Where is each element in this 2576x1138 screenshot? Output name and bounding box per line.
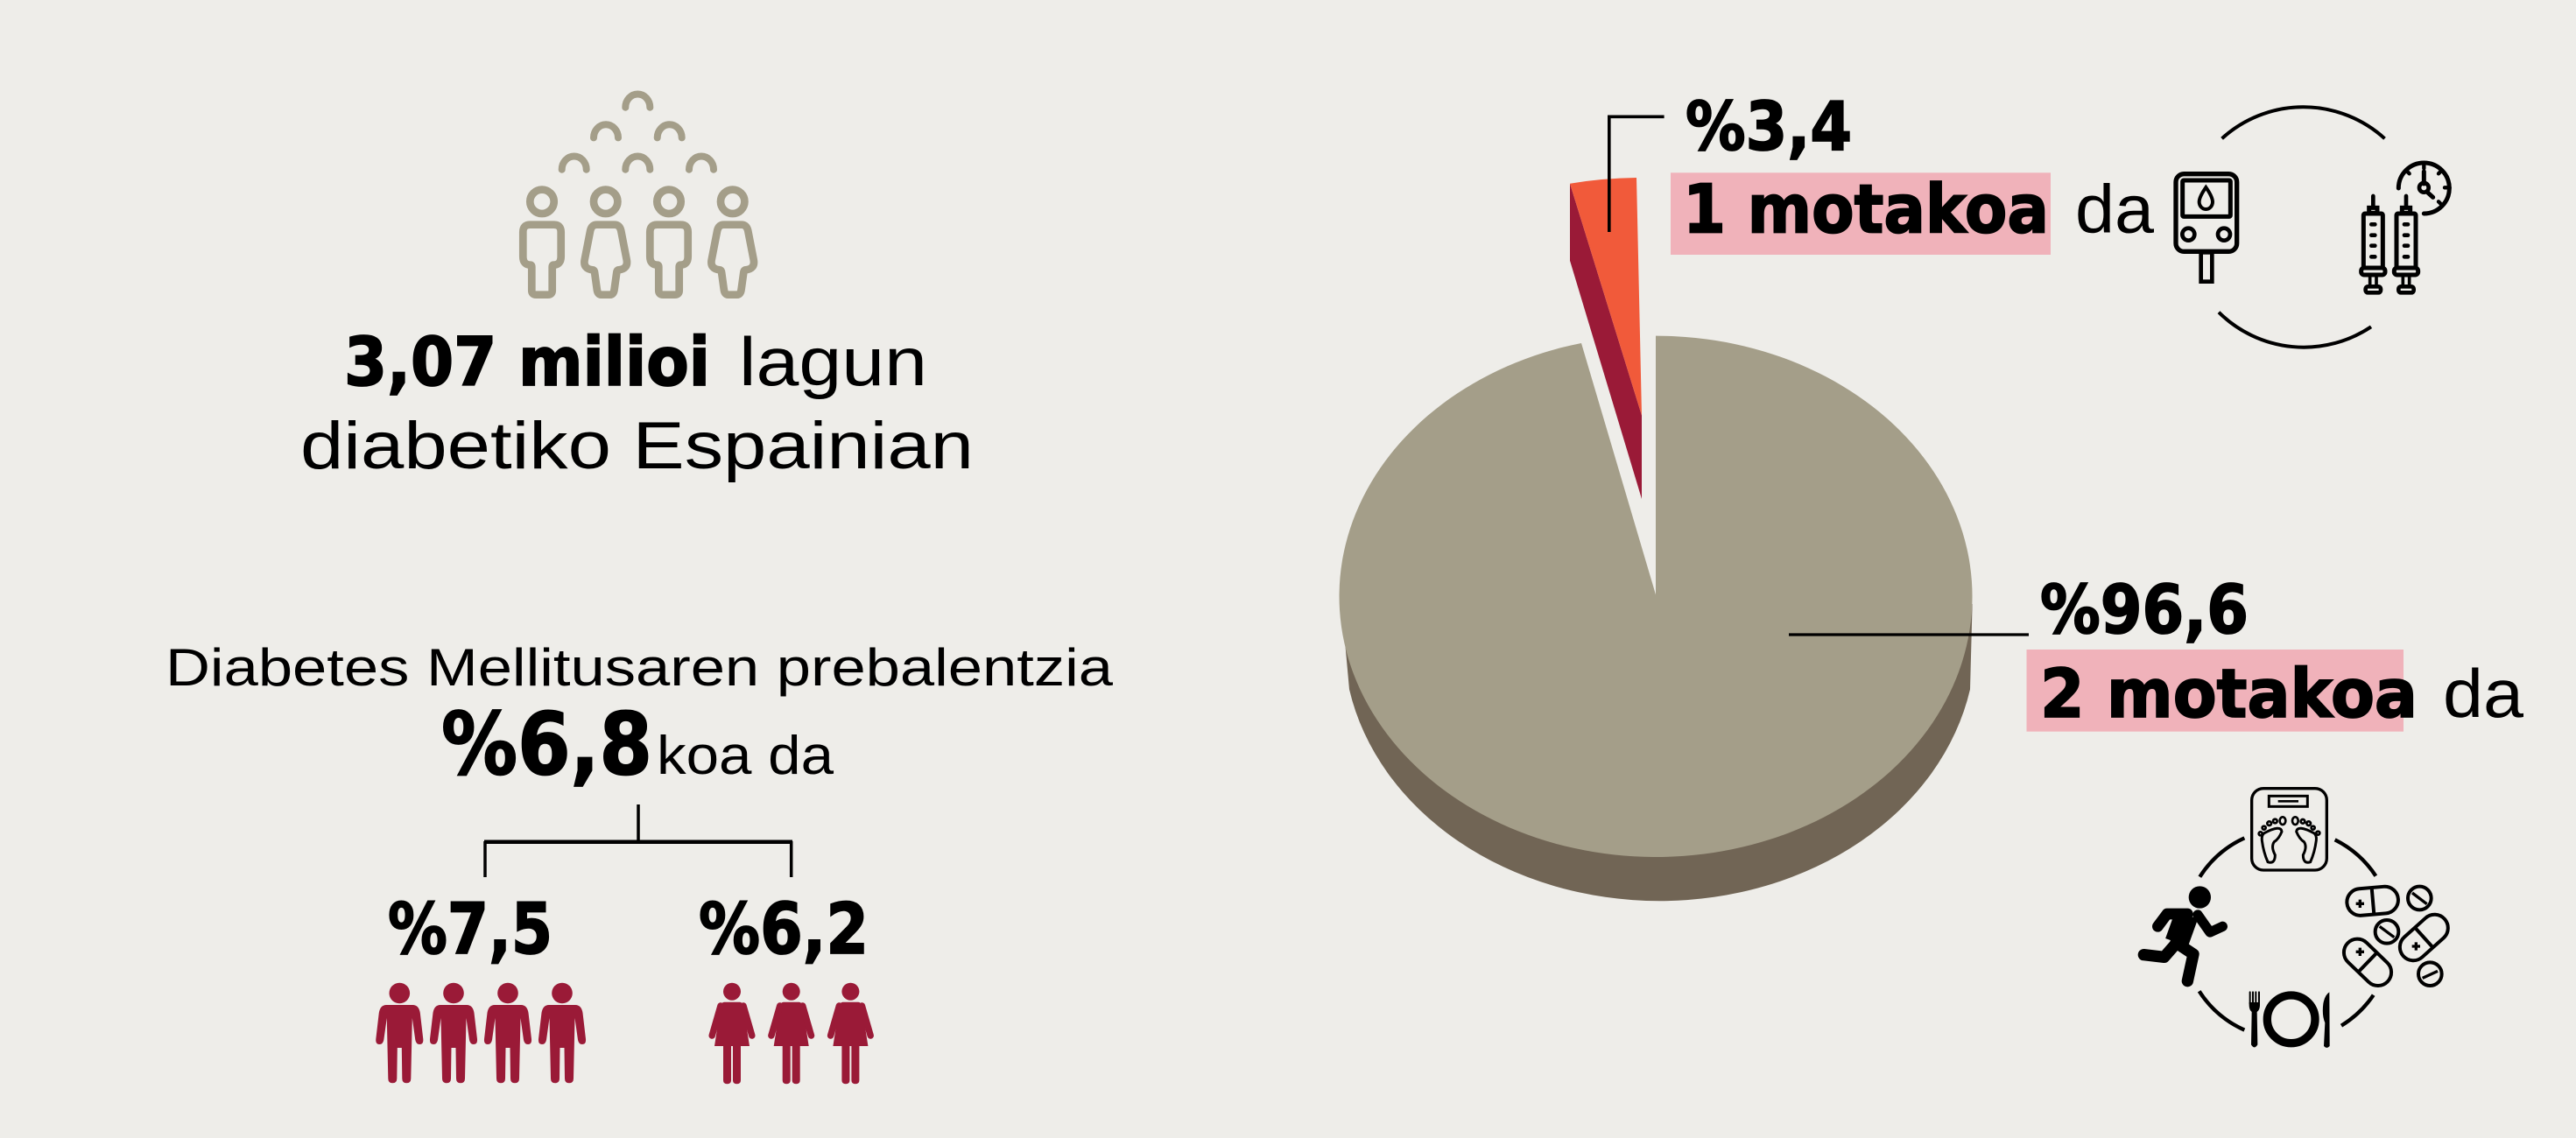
icon: glucose meter (2176, 174, 2237, 282)
icon: bathroom scale (2252, 789, 2326, 870)
heading: diabetics in Spain (300, 323, 974, 483)
pie chart (1340, 178, 1973, 901)
pie slice: type 2 (1340, 336, 1973, 857)
icon group: type 1 treatment (2176, 107, 2450, 348)
pie side (1342, 604, 1973, 901)
heading: diabetics in Spain: lagun (739, 323, 927, 400)
leader line: type 2 (1789, 633, 2029, 636)
ring arcs (2199, 838, 2375, 1030)
leader line: type 1 (1609, 116, 1665, 232)
icon: runner (2143, 886, 2222, 981)
icon: pills (2339, 885, 2453, 991)
text: prevalence label: Diabetes Mellitusaren prebalentzia (165, 638, 1114, 697)
heading: diabetics in Spain: diabetiko Espainian (300, 409, 974, 483)
text: prevalence value (441, 695, 834, 795)
heading: diabetics in Spain: 3,07 milioi (344, 324, 710, 402)
text: women percentage: %6,2 (699, 889, 869, 970)
icon: crowd of people (523, 95, 754, 295)
ring arcs (2219, 107, 2385, 348)
tree connector (484, 804, 792, 877)
label: type 2: da (2443, 655, 2524, 732)
icon: syringes and clock (2361, 163, 2450, 292)
text: prevalence value: koa da (657, 726, 834, 786)
label: type 2: 2 motakoa (2040, 656, 2418, 734)
icon: three women (712, 983, 870, 1084)
label: type 2 percentage: %96,6 (2040, 572, 2249, 650)
icon: four men (376, 983, 586, 1083)
text: men percentage: %7,5 (388, 889, 553, 970)
pie slice: type 1 side (1570, 184, 1642, 499)
label: type 1 percentage: %3,4 (1686, 88, 1852, 166)
icon group: type 2 treatment (2143, 789, 2453, 1048)
pie slice: type 1 top (1570, 178, 1642, 416)
label: type 1: 1 motakoa (1683, 172, 2049, 249)
icon: plate and cutlery (2249, 992, 2330, 1048)
text: prevalence value: %6,8 (441, 695, 652, 795)
label: type 1: da (2075, 170, 2155, 247)
